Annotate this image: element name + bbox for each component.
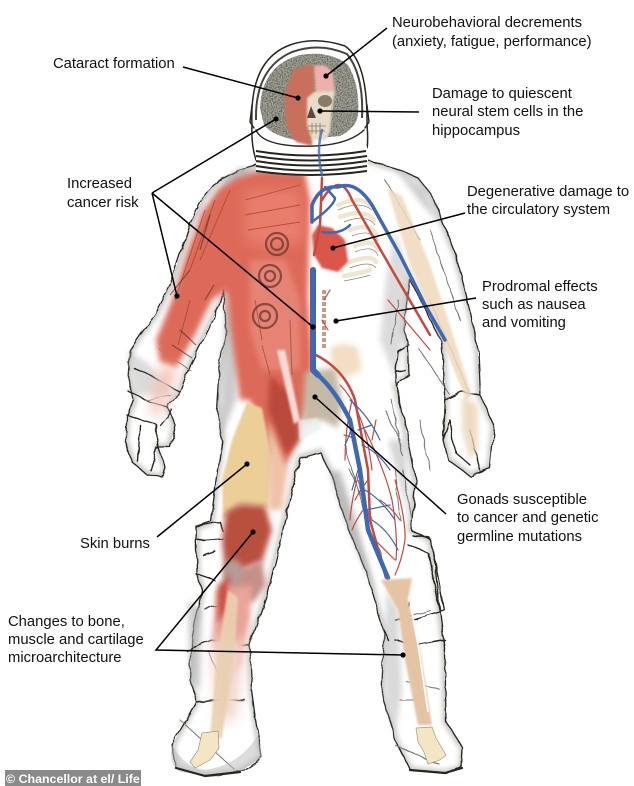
left tibia: [210, 590, 238, 738]
callout: gonads: [312, 394, 599, 545]
rib cage: [338, 200, 378, 281]
left foot bones: [190, 731, 219, 768]
right tibia: [381, 578, 432, 725]
suit shading: [128, 168, 440, 735]
callout: circulatory damage: Degenerative damage to: [467, 184, 629, 200]
abdominal white strip: [277, 350, 300, 424]
right arm bones: [387, 188, 472, 400]
astronaut figure: [125, 41, 494, 777]
lower leg muscle: [212, 585, 252, 680]
callout: prodromal effects: and vomiting: [482, 315, 566, 331]
right foot bones: [416, 727, 446, 764]
callout: bone, muscle and cartilage: Changes to bone,: [8, 614, 125, 630]
eye socket: [318, 95, 332, 107]
collar rings: [256, 132, 368, 176]
callout: skin burns: Skin burns: [80, 536, 150, 552]
lumbar spine: [322, 290, 326, 350]
callout: neural stem cell damage: Damage to quiescent: [432, 86, 572, 102]
callout: increased cancer risk: [67, 116, 316, 330]
callout: circulatory damage: [330, 184, 629, 251]
helmet side tabs: [250, 105, 369, 128]
callout: bone, muscle and cartilage: [8, 529, 406, 666]
knee burn area: [222, 504, 272, 580]
muscle rosettes: [253, 233, 288, 328]
spacesuit body: [125, 160, 494, 776]
callout: neurobehavioral decrements: Neurobehavioral decrements: [392, 15, 582, 31]
callout: bone, muscle and cartilage: muscle and cartilage: [8, 632, 144, 648]
suit fold lines: [127, 180, 480, 770]
suit edge shading: [125, 160, 494, 776]
helmet shell: [252, 41, 368, 160]
callout: skin burns: [80, 461, 250, 552]
skull: [307, 90, 335, 140]
callout: prodromal effects: [333, 279, 598, 331]
arteries: [314, 178, 430, 578]
callout: cataract formation: Cataract formation: [53, 56, 175, 72]
callout: neural stem cell damage: [317, 86, 583, 139]
face muscle: [284, 65, 314, 146]
groin dark muscle: [268, 375, 300, 456]
visor interior: [260, 54, 358, 140]
callout: neural stem cell damage: neural stem cells in the: [432, 104, 583, 120]
right hand bones: [462, 395, 478, 460]
brain: [314, 65, 335, 94]
callout: gonads: Gonads susceptible: [457, 492, 587, 508]
callout: neurobehavioral decrements: (anxiety, fatigue, performance): [392, 34, 592, 50]
callout: gonads: germline mutations: [457, 529, 582, 545]
callout: prodromal effects: Prodromal effects: [482, 279, 598, 295]
dark forearm lines: [170, 215, 214, 358]
teeth: [308, 123, 326, 134]
abdomen highlight: [250, 260, 300, 370]
credit watermark: © Chancellor at el/ Life: [6, 772, 140, 786]
callout: circulatory damage: the circulatory system: [467, 202, 610, 218]
callout: cataract formation: [53, 56, 301, 101]
heart: [312, 225, 348, 272]
callout: neural stem cell damage: hippocampus: [432, 123, 520, 139]
skeleton and vessels: [298, 85, 478, 764]
callout: prodromal effects: such as nausea: [482, 297, 586, 313]
skin burn patch on thigh: [222, 402, 272, 520]
chest highlight: [245, 190, 305, 250]
helmet and head: [250, 41, 369, 176]
boots: [171, 735, 462, 777]
right fibula gap: [409, 596, 428, 712]
knee: [226, 560, 266, 602]
callout: neurobehavioral decrements: [323, 15, 592, 79]
muscle fibre lines: [175, 185, 300, 375]
callout: increased cancer risk: cancer risk: [67, 195, 139, 211]
callout: bone, muscle and cartilage: microarchitecture: [8, 650, 121, 666]
forearm fade: [150, 365, 178, 420]
visor rim: [256, 47, 362, 120]
callout: gonads: to cancer and genetic: [457, 510, 599, 526]
muscle layer: [150, 170, 312, 768]
veins: [319, 85, 335, 175]
callout: increased cancer risk: Increased: [67, 176, 132, 192]
suit outline: [125, 160, 494, 776]
pelvis bones: [330, 344, 362, 378]
nose: [307, 106, 316, 118]
left arm and torso muscle: [156, 170, 312, 470]
